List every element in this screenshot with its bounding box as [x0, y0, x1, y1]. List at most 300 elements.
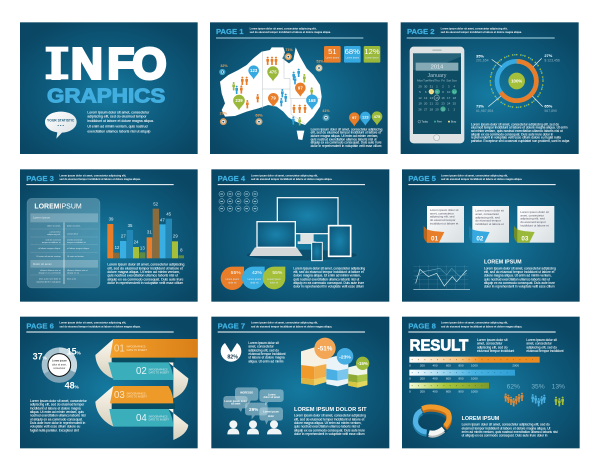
- text block: eiusmod tempor incididunt: [248, 352, 286, 356]
- text block: dolor in reprehenderit in voluptate velit esse cillum: [294, 432, 365, 436]
- speech bubbles: INGRESSO: [240, 392, 253, 395]
- glass table: [27, 198, 100, 288]
- donut labels: [476, 53, 560, 113]
- ribbon 01: 01: [114, 343, 125, 354]
- glass table: consectetur: [67, 233, 78, 236]
- phone with calendar: 7: [430, 90, 432, 94]
- progress bar blue: 1000: [471, 377, 478, 381]
- card 02: [469, 206, 509, 243]
- percentage donuts: 52%: [316, 60, 324, 64]
- glass table: Dolor sit amet: [33, 262, 52, 266]
- ribbon 03: DATE TO INSERT: [127, 396, 147, 399]
- percentages: 35%: [531, 383, 545, 390]
- donut labels: 27%: [544, 53, 553, 58]
- text block: Lorem ipsum dolor sit amet, consectetur adipiscing elit, sed do: [471, 122, 559, 126]
- glass table: Ut enim ad minim: [67, 255, 84, 258]
- card 01: adipiscing elit, sed: [430, 215, 455, 219]
- text block: dolor in reprehenderit in voluptate velit esse cillum: [293, 285, 364, 289]
- phone with calendar: 29: [435, 107, 439, 111]
- speech bubbles: Lorem ipsum: [263, 411, 280, 414]
- phone with calendar: 8: [436, 90, 438, 94]
- laptop: [250, 222, 302, 256]
- subheading: lorem ipsum dolor sit: LOREM IPSUM DOLOR SIT: [294, 407, 367, 413]
- phone with calendar: 12: [418, 96, 422, 100]
- people cluster blue: [531, 394, 546, 406]
- phone: [312, 242, 322, 261]
- phone with calendar: 2014: [431, 65, 443, 71]
- speech bubbles: Lorem ipsum dolor: [224, 400, 247, 403]
- percentage drops: dolor sit: [250, 281, 259, 284]
- text block: dolore magna aliqua. Ut enim ad minim veniam,: [484, 274, 552, 278]
- text column 1: eiusmod tempor incididunt: [477, 349, 514, 353]
- card 02: 02: [476, 235, 484, 242]
- heading: PAGE 5: [408, 174, 437, 183]
- text block: Ut enim ad minim veniam, quis nostrud: [87, 124, 148, 128]
- speech bubbles: dolor sit amet: [264, 396, 280, 399]
- text block: elit, sed do eiusmod tempor incididunt ut labore et: [294, 417, 364, 421]
- card 01: Lorem ipsum dolor sit: [430, 208, 459, 212]
- ribbon 03: 03: [114, 390, 125, 401]
- people icons on map: [232, 57, 313, 125]
- title: INFO: INFO: [50, 39, 167, 88]
- heading: PAGE 1: [216, 27, 244, 36]
- glass table: Duis aute: [67, 277, 77, 280]
- glass table: reprehenderit in voluptate: [36, 280, 61, 283]
- circular chart: consectetur: [53, 367, 66, 370]
- bar chart: 45: [166, 211, 172, 216]
- speech bubbles: dolor: [268, 415, 274, 418]
- pie chart: [221, 343, 241, 362]
- text block: Lorem ipsum dolor sit amet, consectetur: [87, 110, 150, 114]
- speech bubbles: [223, 387, 284, 425]
- text block: Lorem ipsum dolor sit amet, consectetur adipiscing: [294, 414, 366, 418]
- text block: Lorem ipsum dolor sit amet, consectetur adipiscing: [484, 266, 556, 270]
- progress bar orange: 400: [433, 364, 438, 368]
- text block: dolore magna aliqua. Ut enim ad minim veniam,: [311, 134, 378, 138]
- glass table: aliquip ex ea: [67, 273, 80, 275]
- text block: Lorem ipsum dolor sit amet, consectetur adipiscing elit, sed do: [462, 423, 550, 427]
- ribbon 04: 04: [136, 413, 147, 424]
- phone with calendar: 23: [441, 102, 445, 106]
- speech bubbles: sit amet: [231, 403, 241, 406]
- monitor: [277, 198, 338, 244]
- phone with calendar: Fri: [441, 78, 445, 82]
- speech bubble: • • •: [57, 122, 64, 127]
- people silhouettes: [227, 420, 282, 434]
- text block: exercitation ullamco laboris nisi ut aliquip: [87, 130, 151, 134]
- chart percentages: [33, 347, 82, 390]
- text column 2: amet, consectetur: [526, 342, 553, 346]
- bar chart: 8: [180, 248, 183, 253]
- ribbon 02: INFOGRAPHICS: [149, 368, 168, 371]
- text block: aliquip ex ea commodo consequat. Duis aute irure: [107, 277, 184, 281]
- 3D block chart: [301, 347, 367, 388]
- device shadow: [247, 250, 357, 260]
- circular chart: dolor sit amet,: [52, 364, 67, 367]
- text block: adipiscing elit, sed do eiusmod tempor: [30, 403, 85, 407]
- ribbon 04: INFOGRAPHICS: [149, 415, 168, 418]
- card 02: Lorem ipsum dolor sit: [475, 209, 504, 213]
- subheading: sed do eiusmod tempor incididunt ut labore et dolore magna aliqua.: [251, 325, 333, 328]
- donut labels: 73%: [476, 103, 484, 108]
- panel: page 2: [401, 22, 579, 154]
- map pins: 168: [308, 98, 316, 103]
- phone with calendar: 29: [418, 84, 422, 88]
- heading: PAGE 8: [408, 321, 437, 330]
- phone with calendar: 2: [453, 107, 455, 111]
- glass table: tempor incididunt ut: [67, 241, 86, 244]
- text block: quis nostrud exercitation ullamco laboris nisi ut: [294, 425, 360, 429]
- percentage drops: Lorem ipsum: [248, 278, 261, 281]
- phone with calendar: 30: [424, 84, 428, 88]
- phone with calendar: 15: [435, 96, 439, 100]
- phone with calendar: 31: [430, 84, 433, 88]
- progress bar green: 0: [409, 390, 411, 394]
- text block: Lorem ipsum dolor sit: [248, 341, 279, 345]
- percentage donuts: [220, 48, 330, 124]
- text block: dolor in reprehenderit in voluptate velit esse cillum: [311, 144, 382, 148]
- stat boxes: 68%: [345, 47, 360, 56]
- percentage drops: Lorem ipsum: [267, 278, 281, 281]
- glass table: ullamco laboris nisi ut: [67, 269, 88, 272]
- bar chart: 27: [121, 234, 126, 239]
- circular chart: [45, 350, 74, 380]
- speech bubble: [45, 112, 77, 139]
- ribbon 02: 02: [136, 366, 147, 377]
- pie chart: 82%: [227, 355, 238, 361]
- text block: Lorem ipsum dolor sit amet, consectetur adipiscing: [311, 127, 383, 131]
- subheading: sed do eiusmod tempor incididunt ut labore et dolore magna aliqua.: [59, 178, 141, 181]
- text block: reprehenderit in voluptate velit esse cillum dolore eu fugiat nulla: [471, 136, 561, 140]
- bar chart: 31: [147, 230, 152, 235]
- subheading: Lorem ipsum dolor sit amet, consectetur adipiscing elit,: [441, 322, 508, 325]
- ribbon 02: [136, 366, 169, 377]
- text block: quis nostrud exercitation ullamco laboris nisi ut: [293, 277, 359, 281]
- text block: dolore magna aliqua. Ut enim ad minim veniam,: [293, 274, 361, 278]
- stat boxes: [324, 46, 380, 63]
- text block: dolor in reprehenderit in voluptate velit esse cillum: [107, 281, 183, 285]
- text block: aliqua. Ut enim ad minim: [248, 359, 284, 363]
- phone with calendar: 26: [418, 107, 422, 111]
- progress bar blue: 0: [409, 377, 411, 381]
- text block: enim ad minim veniam, quis nostrud exercitation ullamco laboris nisi: [462, 430, 558, 434]
- text block: pariatur. Excepteur sint occaecat cupidatat non proident, sunt in culpa: [471, 139, 570, 143]
- phone with calendar: 25: [453, 102, 456, 106]
- progress bar green: [409, 383, 489, 394]
- card 01: 01: [431, 235, 439, 242]
- percentage drops: 55%: [231, 270, 241, 276]
- glass table: Duis aute irure dolor in: [39, 277, 61, 280]
- phone with calendar: Sun: [452, 78, 457, 82]
- map pins: 239: [235, 98, 243, 103]
- bar chart: 24: [134, 239, 139, 244]
- donut labels: 35%: [476, 53, 484, 58]
- stat boxes: Lorem ipsum: [326, 57, 339, 60]
- phone with calendar: 1: [448, 107, 450, 111]
- chart percentages: 37%: [33, 351, 48, 361]
- text block: elit, sed do eiusmod tempor incididunt ut labore et: [311, 131, 381, 135]
- phone with calendar: [410, 47, 464, 143]
- line chart: [413, 265, 470, 289]
- text column 2: Lorem ipsum dolor sit: [526, 338, 557, 342]
- text block: Lorem ipsum dolor sit amet, consectetur adipiscing: [107, 263, 184, 267]
- text block: adipiscing elit, sed do: [248, 348, 279, 352]
- bar chart: 35: [128, 223, 133, 228]
- phone with calendar: 11: [453, 90, 456, 94]
- text block: incididunt ut labore et dolore magna: [30, 406, 81, 410]
- progress bar blue: 600: [446, 377, 451, 381]
- progress bar blue: 400: [433, 377, 438, 381]
- percentages: 62%: [507, 383, 520, 390]
- speech bubbles: 29%: [249, 407, 259, 412]
- progress bar blue: 800: [459, 377, 464, 381]
- text block: elit, sed do eiusmod tempor incididunt ut labore et: [293, 270, 364, 274]
- glass table: consectetur: [50, 230, 61, 233]
- glass table: dolor sit amet,: [67, 225, 81, 228]
- subheading: sed do eiusmod tempor incididunt ut labore et dolore magna aliqua.: [441, 325, 523, 328]
- ribbon 02: DATE TO INSERT: [149, 372, 169, 375]
- card 01: incididunt ut labore et: [430, 221, 459, 225]
- heading: PAGE 6: [26, 321, 54, 330]
- subheading: sed do eiusmod tempor incididunt ut labore et dolore magna aliqua.: [251, 178, 333, 181]
- panel: page 7: [211, 317, 389, 448]
- panel: page 1: [210, 22, 388, 154]
- card 03: Lorem ipsum dolor sit: [520, 210, 549, 214]
- glass table: adipiscing elit,: [47, 233, 61, 236]
- text block: dolore magna aliqua. Ut enim ad minim veniam,: [107, 270, 180, 274]
- panel: page 8: [402, 317, 580, 448]
- subheading: sed do eiusmod tempor incididunt ut labore et dolore magna aliqua.: [441, 178, 523, 181]
- stat boxes: Lorem ipsum: [365, 57, 379, 60]
- subheading: sed do eiusmod tempor incididunt ut labore et dolore magna aliqua.: [250, 31, 331, 34]
- people cluster green: [555, 397, 564, 406]
- chart percentages: 15%: [67, 347, 82, 357]
- progress bar orange: [409, 357, 540, 368]
- heading: PAGE 2: [407, 27, 435, 36]
- card 02: do eiusmod tempor: [475, 219, 501, 223]
- stat boxes: Lorem ipsum: [346, 57, 359, 60]
- text column 2: adipiscing elit, sed do: [526, 345, 557, 349]
- glass table: Lorem ipsum: [33, 216, 51, 220]
- card 03: do eiusmod tempor: [520, 220, 546, 224]
- card 02: incididunt ut labore et: [475, 222, 504, 226]
- subheading: Lorem ipsum dolor sit amet, consectetur adipiscing elit,: [251, 322, 318, 325]
- donut labels: 201,654: [476, 59, 489, 63]
- phone with calendar: Tue: [423, 78, 429, 82]
- phone with calendar: January: [428, 73, 447, 79]
- phone with calendar: 14: [430, 96, 433, 100]
- percentages: 13%: [552, 383, 565, 390]
- panel: page 4: [211, 169, 389, 302]
- legend pins: 97: [352, 115, 357, 120]
- subheading: Lorem ipsum dolor sit amet, consectetur adipiscing elit,: [251, 174, 318, 177]
- bar chart: 29: [173, 233, 178, 238]
- glass table: aliquip ex ea commodo: [38, 273, 61, 275]
- title: RESULT: RESULT: [410, 337, 469, 354]
- panel: page 6: [20, 317, 198, 448]
- percentage bubbles: -23%: [339, 354, 351, 360]
- phone with calendar: 21: [430, 102, 433, 106]
- phone with calendar: 3: [448, 84, 450, 88]
- map pins: [233, 65, 318, 110]
- chart percentages: 48%: [65, 380, 80, 390]
- phone with calendar: Mon: [417, 78, 423, 82]
- title: GRAPHICS: GRAPHICS: [47, 85, 165, 107]
- map pins: 123: [250, 68, 258, 73]
- panel: page 3: [20, 169, 198, 302]
- ribbon 01: DATE TO INSERT: [127, 349, 147, 352]
- phone with calendar: 20: [424, 102, 428, 106]
- card 01: [424, 206, 464, 243]
- text block: aliquip ex ea commodo consequat. Duis aute irure dolor in: [471, 132, 553, 136]
- glass table: ullamco laboris nisi ut: [40, 269, 61, 272]
- text column 1: adipiscing elit, sed do: [477, 345, 508, 349]
- phone with calendar: 2: [442, 84, 444, 88]
- ribbon 04: [136, 413, 169, 424]
- text block: Lorem ipsum dolor sit amet, consectetur adipiscing: [293, 266, 365, 270]
- subheading: lorem ipsum: LOREM IPSUM: [462, 416, 500, 422]
- phone with calendar: 18: [453, 96, 456, 100]
- text block: ut aliquip ex ea commodo consequat. Duis aute irure dolor in: [462, 434, 548, 438]
- ribbon 01: [114, 343, 147, 354]
- percentage bubbles: -51%: [318, 346, 333, 353]
- card 02: amet, consectetur: [475, 212, 499, 216]
- percentage drops: dolor sit: [270, 281, 278, 284]
- text block: amet, consectetur: [248, 345, 275, 349]
- speech bubbles: Lorem: [268, 393, 276, 396]
- card 03: incididunt ut labore et: [520, 223, 549, 227]
- glass table: Ut enim ad minim veniam: [36, 255, 61, 258]
- card 03: 03: [521, 235, 529, 242]
- glass table: ut labore magna aliqua.: [67, 247, 90, 250]
- progress bar orange: 800: [459, 364, 464, 368]
- phone with calendar: 5: [419, 90, 421, 94]
- text block: aliquip ex ea commodo consequat. Duis aute irure: [484, 281, 555, 285]
- donut labels: $ 123,456: [544, 59, 560, 63]
- glass table: LOREMIPSUM: [34, 204, 82, 211]
- subheading: Lorem ipsum dolor sit amet, consectetur adipiscing elit,: [441, 174, 508, 177]
- bar chart: 13: [140, 245, 145, 250]
- stat boxes: 12%: [364, 47, 380, 56]
- icon grid: [219, 191, 258, 211]
- bar chart: 52: [153, 201, 159, 206]
- phone with calendar: 1: [436, 84, 438, 88]
- percentage drops: 55%: [272, 270, 283, 276]
- progress bar orange: 200: [420, 364, 425, 368]
- text block: dolore magna aliqua. Ut enim ad minim veniam,: [294, 421, 362, 425]
- text block: quis nostrud exercitation ullamco laboris nisi ut: [484, 277, 550, 281]
- text block: quis nostrud exercitation ullamco laboris nisi ut: [107, 274, 178, 278]
- text column 2: eiusmod tempor incididunt: [526, 349, 564, 353]
- text block: aliquip ex ea commodo consequat. Duis aute irure: [311, 141, 382, 145]
- card 03: adipiscing elit, sed: [520, 217, 545, 221]
- subheading: Lorem ipsum dolor sit amet, consectetur adipiscing elit,: [441, 27, 508, 30]
- progress bar green: 1000: [471, 390, 478, 394]
- glass table: dolor sit amet,: [47, 225, 61, 228]
- text block: dolor in reprehenderit in voluptate velit esse cillum: [484, 285, 555, 289]
- ribbon 03: [114, 390, 147, 401]
- donut chart: 100%: [511, 79, 522, 84]
- phone with calendar: Busy: [451, 122, 457, 124]
- text block: aliqua. Ut enim ad minim veniam, quis: [30, 410, 84, 414]
- phone with calendar: Thu: [434, 78, 440, 82]
- percentage donuts: 69%: [255, 113, 263, 117]
- glass table: ut labore magna aliqua.: [38, 247, 61, 250]
- people cluster orange: [504, 393, 523, 406]
- donut labels: 61,987,654: [476, 109, 494, 113]
- phone with calendar: 22: [435, 102, 439, 106]
- phone with calendar: Today: [422, 122, 429, 124]
- text column 1: Lorem ipsum dolor sit: [477, 338, 508, 342]
- text block: aliquip ex ea commodo consequat. Duis aute irure: [293, 281, 364, 285]
- percentages: [507, 383, 565, 390]
- subheading: lorem ipsum: LOREM IPSUM: [484, 260, 522, 266]
- donut chart: [488, 55, 543, 107]
- glass table: tempor incididunt ut: [42, 241, 61, 244]
- map pins: 475: [269, 69, 277, 74]
- heading: PAGE 3: [26, 174, 54, 183]
- map pins: 79: [271, 96, 276, 101]
- text block: aliquip ex ea commodo consequat. Duis aute irure: [294, 428, 365, 432]
- percentage bubbles: -15%: [358, 361, 368, 366]
- ribbon 04: DATE TO INSERT: [149, 419, 169, 422]
- card 01: amet, consectetur: [430, 211, 454, 215]
- text block: eiusmod tempor incididunt ut labore et dolore magna aliqua. Ut enim: [471, 126, 568, 130]
- phone with calendar: 28: [430, 107, 433, 111]
- progress bar orange: 0: [409, 364, 411, 368]
- progress bar orange: 2000: [512, 364, 519, 368]
- text block: eiusmod tempor incididunt ut labore et dolore magna aliqua. Ut: [462, 426, 551, 430]
- glass table: sed do eiusmod: [45, 239, 61, 241]
- text block: elit, sed do eiusmod tempor incididunt ut labore et: [107, 266, 183, 270]
- text block: fugiat nulla pariatur. Excepteur sint: [30, 428, 79, 432]
- speech bubble: YOUR STATISTIC: [47, 119, 75, 123]
- phone with calendar: Sat: [446, 78, 451, 82]
- card 02: adipiscing elit, sed: [475, 215, 500, 219]
- legend pins: 123: [362, 114, 369, 119]
- progress bar blue: [409, 370, 515, 381]
- panel: page 5: [402, 169, 580, 302]
- phone with calendar: 19: [418, 102, 422, 106]
- subheading: Lorem ipsum dolor sit amet, consectetur adipiscing elit,: [59, 322, 126, 325]
- phone with calendar: 17: [447, 96, 451, 100]
- ribbon 01: INFOGRAPHICS: [127, 346, 146, 349]
- bar chart: [107, 201, 184, 258]
- donut labels: 65%: [544, 103, 553, 108]
- progress bar green: 200: [420, 390, 425, 394]
- text block: Duis aute irure dolor in reprehenderit in: [30, 421, 86, 425]
- heading: PAGE 4: [218, 174, 246, 183]
- donut labels: 567,890: [544, 109, 557, 113]
- text block: ad minim veniam, quis nostrud exercitation ullamco laboris nisi ut: [471, 129, 563, 133]
- card 03: [514, 206, 554, 243]
- panel: cover: [20, 22, 198, 154]
- phone with calendar: 30: [441, 107, 445, 111]
- percentage donuts: 71%: [285, 48, 293, 52]
- percentage bubbles: [314, 338, 369, 370]
- subheading: sed do eiusmod tempor incididunt ut labore et dolore magna aliqua.: [59, 325, 141, 328]
- map of Australia: [220, 47, 322, 140]
- phone with calendar: Free: [437, 121, 442, 124]
- phone with calendar: 13: [424, 96, 428, 100]
- text block: elit, sed do eiusmod tempor incididunt ut labore et: [484, 270, 554, 274]
- bar chart: 39: [109, 217, 114, 222]
- phone with calendar: 6: [425, 90, 427, 94]
- text block: nostrud exercitation ullamco laboris nisi: [30, 414, 86, 418]
- percentage drops: dolor sit: [228, 281, 237, 284]
- text block: adipiscing elit, sed do eiusmod tempor: [87, 115, 147, 119]
- bar chart: 12: [115, 245, 120, 250]
